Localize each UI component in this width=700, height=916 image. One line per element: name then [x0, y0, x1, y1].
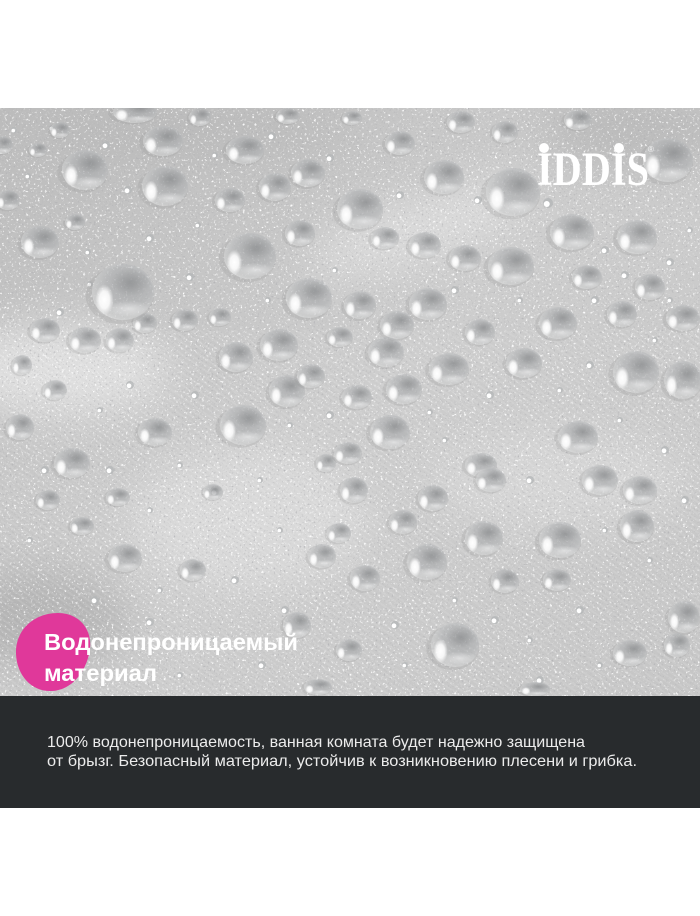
small droplets [11, 125, 693, 684]
description text: от брызг. Безопасный материал, устойчив к возникновению плесени и грибка. [47, 753, 637, 770]
logo: IDDIS: IDDIS [537, 143, 649, 196]
heading: Водонепроницаемый [44, 629, 298, 655]
panel: water droplets photo [0, 90, 700, 697]
heading [44, 629, 298, 686]
tonal lighting patches of the fabric [0, 90, 700, 670]
heading: материал [44, 660, 157, 686]
description text [47, 734, 637, 770]
woven fabric texture [0, 330, 700, 696]
description text: 100% водонепроницаемость, ванная комната будет надежно защищена [47, 734, 585, 751]
panel: dark description band [0, 696, 700, 808]
infographic canvas [0, 108, 700, 808]
tiny speckle droplets [0, 108, 700, 696]
pink blob behind heading [16, 613, 90, 691]
logo: IDDIS: ® [648, 145, 654, 154]
large droplets [0, 101, 700, 697]
